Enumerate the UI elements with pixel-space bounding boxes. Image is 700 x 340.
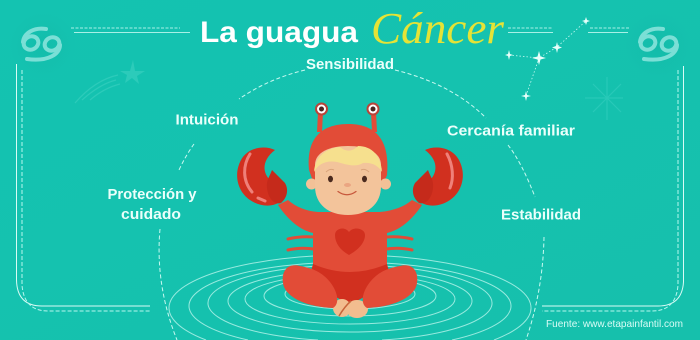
source: Fuente: www.etapainfantil.com <box>546 318 683 330</box>
label: Protección y cuidado: cuidado <box>121 206 181 223</box>
ears <box>306 178 391 190</box>
title <box>200 4 505 53</box>
arms and torso <box>278 200 422 272</box>
right claw <box>413 147 463 206</box>
title: Cáncer <box>371 4 505 53</box>
label: Sensibilidad: Sensibilidad <box>306 56 394 73</box>
title: La guagua <box>200 16 358 49</box>
baby crab character <box>237 102 463 318</box>
icon: left cancer symbol <box>21 29 62 60</box>
eye stalks <box>317 112 377 132</box>
icon: constellation <box>505 17 590 101</box>
decorative frame <box>16 28 684 311</box>
feet <box>333 299 368 318</box>
shorts <box>308 264 392 303</box>
label: Protección y cuidado <box>108 186 197 223</box>
eyes <box>315 102 380 116</box>
label: Cercanía familiar: Cercanía familiar <box>447 122 575 140</box>
heart <box>335 228 365 255</box>
body whiskers <box>288 237 412 250</box>
label: Protección y cuidado: Protección y <box>108 186 197 203</box>
ripples <box>169 255 531 340</box>
facial features <box>326 169 369 195</box>
legs <box>283 265 337 308</box>
label: Intuición: Intuición <box>176 112 238 128</box>
icon: faint star <box>585 77 623 120</box>
left claw <box>237 147 287 206</box>
dashed arc <box>159 70 544 340</box>
face <box>315 146 381 215</box>
label: Estabilidad: Estabilidad <box>501 206 581 224</box>
icon: right cancer symbol <box>638 29 679 60</box>
hair <box>314 146 382 172</box>
hood <box>309 124 387 190</box>
icon: faint shooting star <box>75 60 145 103</box>
decorative halos <box>10 13 691 79</box>
